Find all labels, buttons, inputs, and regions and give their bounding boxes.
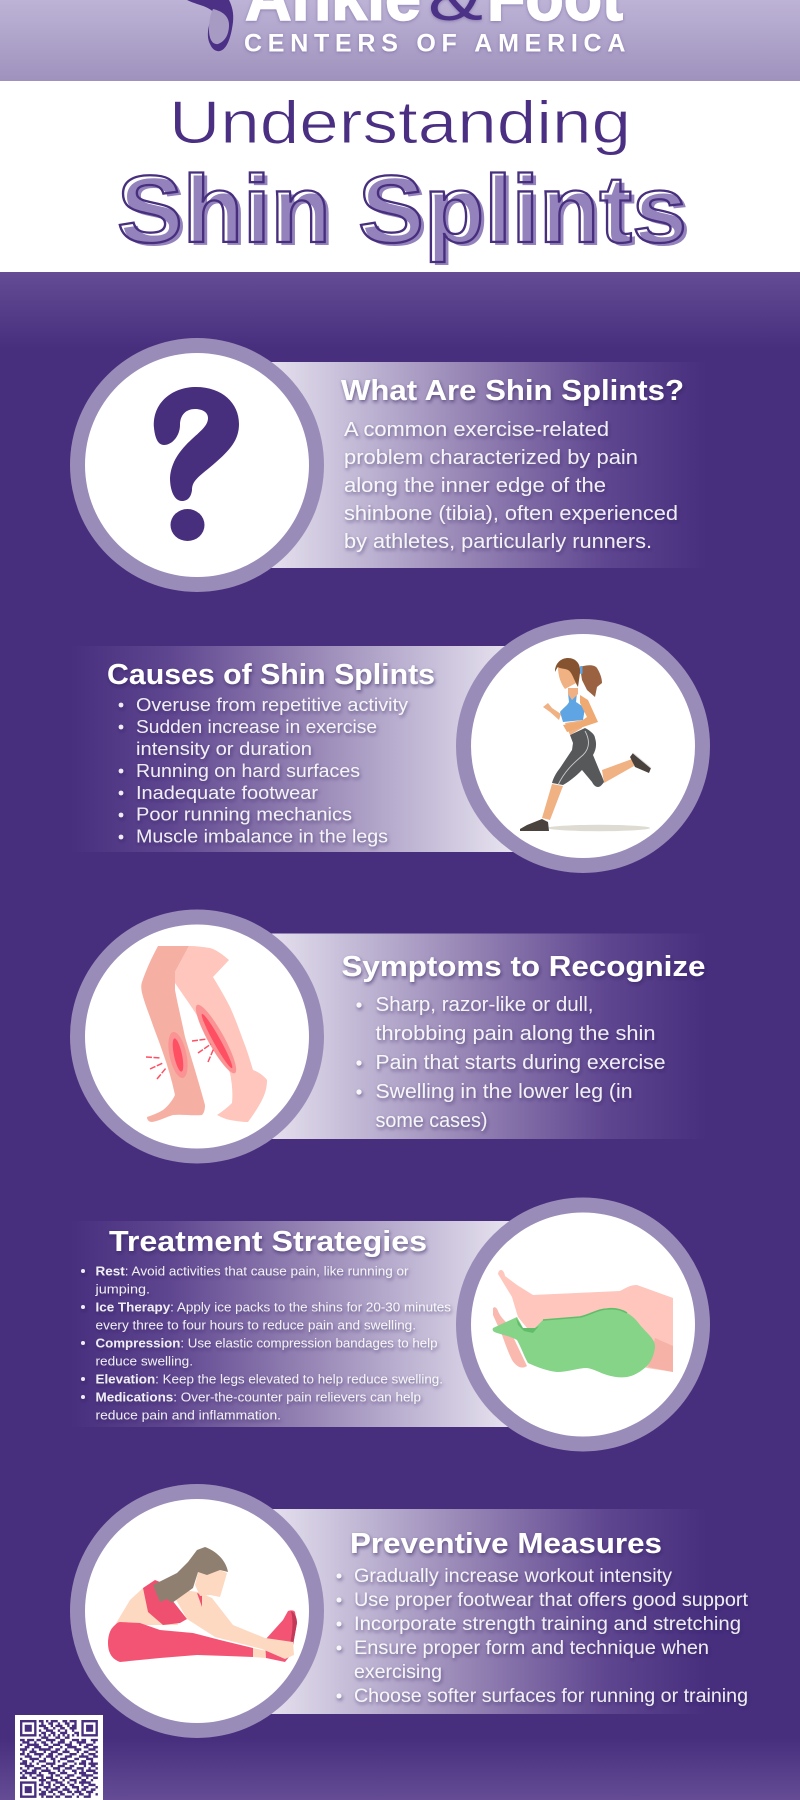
bullet list: Ice Therapy: Apply ice packs to the shins for 20-30 minutes <box>96 1300 452 1314</box>
title line: Shin Splints: Shin Splints <box>117 156 687 263</box>
logo wordmark: CENTERS OF AMERICA <box>244 30 628 58</box>
paragraph: shinbone (tibia), often experienced <box>344 502 678 525</box>
bullet list: jumping. <box>94 1282 150 1296</box>
icon: question mark circle <box>70 338 324 592</box>
bullet list: throbbing pain along the shin <box>376 1022 656 1045</box>
heading: What Are Shin Splints? <box>341 375 684 407</box>
heading: Symptoms to Recognize <box>342 951 706 983</box>
bullet list: reduce swelling. <box>96 1354 193 1368</box>
bullet list: exercising <box>354 1662 442 1683</box>
bullet list: Pain that starts during exercise <box>376 1051 666 1074</box>
bullet list: Ensure proper form and technique when <box>354 1638 709 1659</box>
bullet list <box>356 993 666 1132</box>
panel: symptoms <box>70 910 706 1164</box>
bullet list: Overuse from repetitive activity <box>136 694 409 715</box>
title line: Understanding: Understanding <box>169 89 631 156</box>
paragraph: problem characterized by pain <box>344 446 638 469</box>
panel band <box>197 934 706 1139</box>
paragraph: along the inner edge of the <box>344 474 606 497</box>
bullet list: some cases) <box>376 1109 488 1132</box>
bullet list: Inadequate footwear <box>136 782 318 803</box>
panel band <box>68 1221 583 1427</box>
QR code <box>15 1715 103 1800</box>
logo wordmark <box>244 0 628 58</box>
bullet list: Sharp, razor-like or dull, <box>376 993 594 1016</box>
bullet list: intensity or duration <box>136 738 312 759</box>
title block <box>0 81 800 272</box>
panel band <box>197 1509 706 1714</box>
heading: Treatment Strategies <box>109 1226 427 1258</box>
heading: Causes of Shin Splints <box>107 659 435 691</box>
bullet list: Swelling in the lower leg (in <box>376 1080 632 1103</box>
bullet list: reduce pain and inflammation. <box>96 1408 281 1422</box>
bullet list <box>119 694 409 846</box>
paragraph: by athletes, particularly runners. <box>344 530 652 553</box>
bullet list: Choose softer surfaces for running or training <box>354 1686 748 1707</box>
bullet list: Muscle imbalance in the legs <box>136 826 388 846</box>
panel: prevention <box>70 1484 749 1738</box>
panel: causes <box>68 619 710 873</box>
bullet list: Incorporate strength training and stretching <box>354 1614 741 1635</box>
title line: Shin Splints: Shin Splints <box>121 159 691 266</box>
bullet list: Use proper footwear that offers good support <box>354 1590 749 1611</box>
bullet list <box>336 1566 749 1707</box>
bullet list: Medications: Over-the-counter pain relievers can help <box>96 1390 421 1404</box>
bullet list: Compression: Use elastic compression bandages to help <box>96 1336 438 1350</box>
bullet list: Poor running mechanics <box>136 804 352 824</box>
bullet list: every three to four hours to reduce pain and swelling. <box>96 1318 416 1332</box>
header banner with logo <box>0 0 800 81</box>
paragraph: A common exercise-related <box>344 418 609 441</box>
bullet list: Elevation: Keep the legs elevated to help reduce swelling. <box>96 1372 443 1386</box>
panel band <box>68 646 583 852</box>
panel: what are shin splints <box>70 338 706 592</box>
icon: runner circle <box>456 619 710 873</box>
bullet list: Gradually increase workout intensity <box>354 1566 673 1587</box>
icon: foot logo mark <box>187 0 233 51</box>
paragraph <box>344 418 678 553</box>
heading: Preventive Measures <box>350 1528 662 1560</box>
icon: ice pack circle <box>456 1198 710 1452</box>
icon: stretching woman circle <box>70 1484 324 1738</box>
panel: treatment <box>68 1198 710 1452</box>
bullet list: Rest: Avoid activities that cause pain, like running or <box>96 1264 409 1278</box>
icon: painful legs circle <box>70 910 324 1164</box>
bullet list: Sudden increase in exercise <box>136 716 377 737</box>
bullet list <box>81 1264 452 1422</box>
panel band <box>197 362 706 568</box>
bullet list: Running on hard surfaces <box>136 760 360 781</box>
